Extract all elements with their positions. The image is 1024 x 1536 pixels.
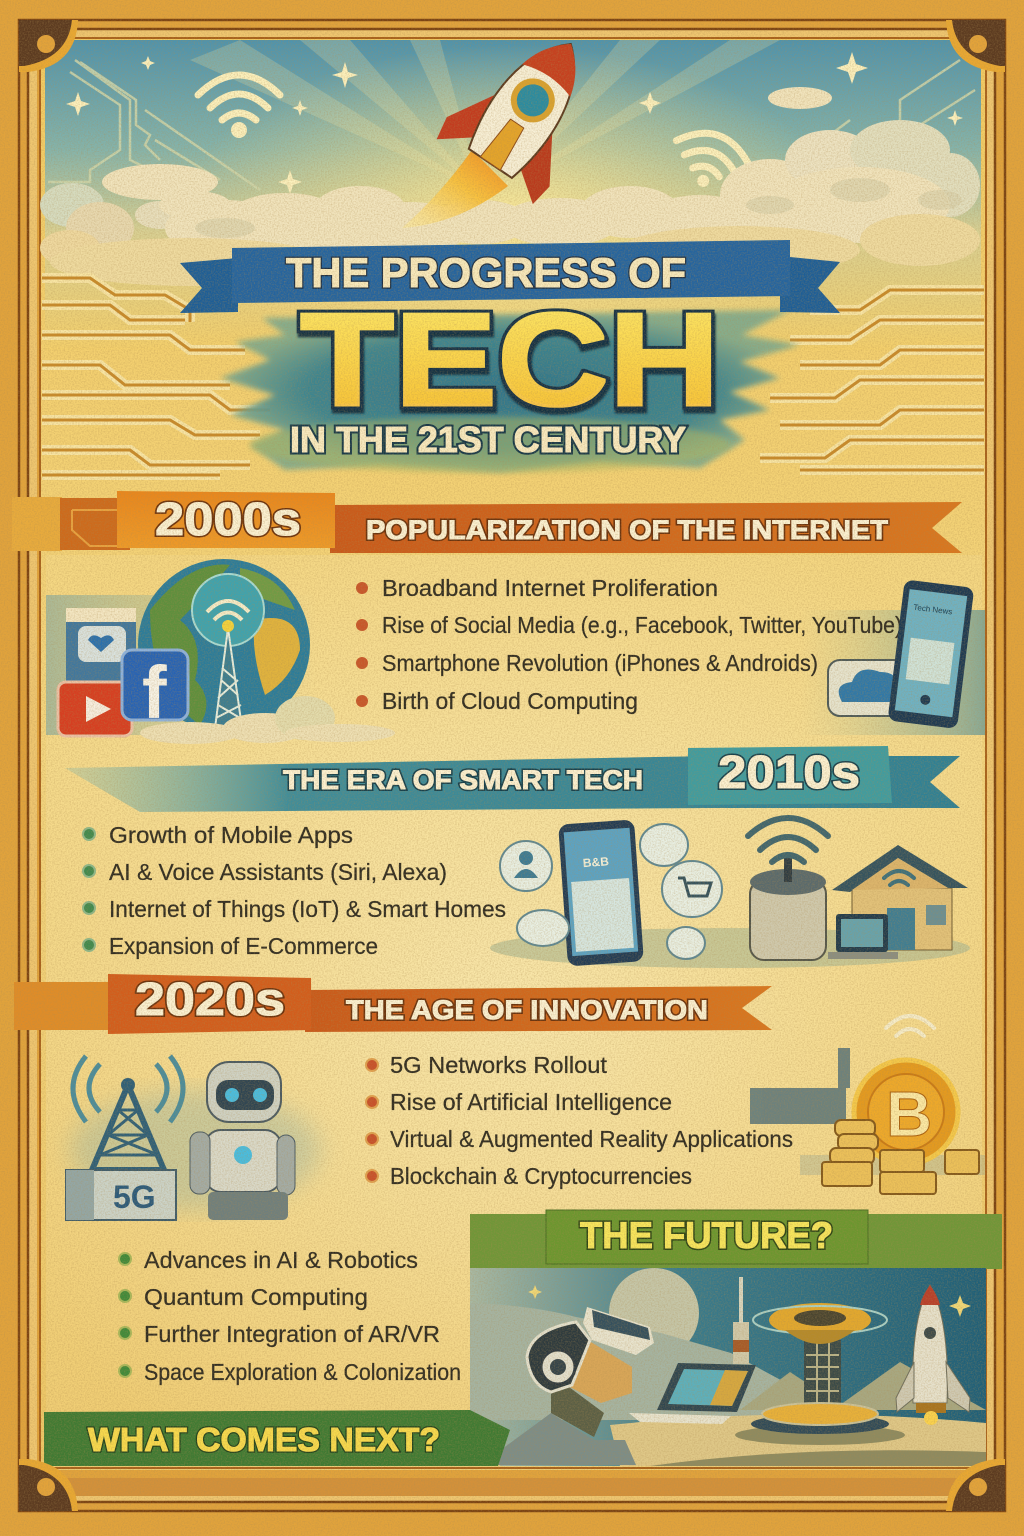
bullets 2010s: Expansion of E-Commerce xyxy=(109,933,378,959)
clouds under globe xyxy=(140,696,395,744)
icon: youtube xyxy=(58,682,132,736)
sun glow xyxy=(180,45,840,385)
title lower glow xyxy=(250,417,730,473)
year label: 2020s xyxy=(135,973,285,1025)
bullets 2020s xyxy=(366,1052,793,1189)
band heading: THE ERA OF SMART TECH xyxy=(283,765,643,795)
ribbon label: WHAT COMES NEXT? xyxy=(88,1421,440,1458)
left scene haze xyxy=(70,1090,320,1210)
icon: quantum computer xyxy=(735,1303,905,1445)
neck xyxy=(551,1387,604,1437)
right circuit board xyxy=(760,290,984,470)
rocket right fin xyxy=(506,122,579,206)
face xyxy=(566,1333,632,1403)
band circuit inset xyxy=(72,510,118,546)
section 2020s band xyxy=(14,973,772,1034)
icon: vr person xyxy=(498,1307,654,1465)
icon: cloud device xyxy=(828,660,912,716)
cloud shading xyxy=(195,178,962,238)
sun rays xyxy=(190,40,780,190)
title burst xyxy=(220,310,800,472)
bullets 2000s: Birth of Cloud Computing xyxy=(382,688,638,714)
lower pale wash xyxy=(46,555,982,1470)
helmet xyxy=(527,1322,590,1392)
frame fill bottom xyxy=(42,1478,986,1496)
corner ornament bottom left xyxy=(19,1459,78,1511)
bullets future: Quantum Computing xyxy=(144,1284,368,1310)
bullets 2000s xyxy=(356,575,902,714)
panel 2000s xyxy=(46,559,985,744)
icon: person in bubble xyxy=(514,851,538,878)
icon: phone with apps: B&B xyxy=(582,854,610,870)
headset visor xyxy=(592,1310,650,1340)
space scene xyxy=(470,1268,986,1466)
bullets future: Space Exploration & Colonization xyxy=(144,1359,461,1385)
title main word: TECH xyxy=(300,286,720,433)
year label: 2010s xyxy=(718,746,860,798)
ribbon tab xyxy=(546,1210,868,1264)
bullets 2020s: Rise of Artificial Intelligence xyxy=(390,1089,672,1115)
ribbon band xyxy=(470,1214,1002,1269)
left circuit board xyxy=(42,278,270,475)
band main xyxy=(65,756,960,812)
bullets future: Advances in AI & Robotics xyxy=(144,1247,418,1273)
icon: robot xyxy=(190,1062,295,1220)
band heading: THE AGE OF INNOVATION xyxy=(346,995,708,1025)
speech bubbles xyxy=(500,824,722,959)
icon: laptop tablet xyxy=(629,1363,756,1424)
left texture xyxy=(46,595,316,735)
ground shadow xyxy=(650,1450,986,1466)
rocket body xyxy=(462,25,599,182)
icon: house wifi xyxy=(884,871,914,885)
icon: house xyxy=(832,845,968,950)
future ribbon xyxy=(470,1210,1002,1269)
section 2010s band xyxy=(65,746,960,812)
icon: facebook: f xyxy=(142,651,167,734)
corner ornament bottom right xyxy=(946,1459,1005,1511)
corner ornament top left xyxy=(19,20,78,72)
icon: bitcoin xyxy=(854,1060,958,1164)
rocket band xyxy=(480,117,527,170)
ground xyxy=(610,1414,986,1466)
wifi icon right xyxy=(665,124,754,198)
bullets 2000s: Rise of Social Media (e.g., Facebook, Twitter, YouTube) xyxy=(382,612,902,638)
bullets 2020s: 5G Networks Rollout xyxy=(390,1052,608,1078)
bullets 2010s: Growth of Mobile Apps xyxy=(109,822,353,848)
clouds xyxy=(40,87,980,286)
rocket left fin xyxy=(433,73,506,157)
scene ground xyxy=(490,928,970,968)
band heading: POPULARIZATION OF THE INTERNET xyxy=(366,515,889,545)
icon: rocket small xyxy=(896,1285,970,1425)
corner ornament top right xyxy=(946,20,1005,72)
icon: cart xyxy=(678,878,711,896)
title ribbon xyxy=(180,240,840,313)
right texture xyxy=(800,610,985,735)
band left end xyxy=(60,498,130,550)
panel 2020s xyxy=(66,1016,985,1220)
sky panel xyxy=(45,40,981,350)
icon: smartphone xyxy=(887,579,974,729)
ribbon shape xyxy=(44,1410,510,1466)
shoulders xyxy=(498,1413,636,1465)
sky circuit lines xyxy=(48,60,975,190)
hills right xyxy=(740,1362,986,1410)
icon: smartphone: Tech News xyxy=(913,603,953,616)
hill left xyxy=(470,1303,790,1420)
bullets 2010s: AI & Voice Assistants (Siri, Alexa) xyxy=(109,859,447,885)
bullets 2020s: Blockchain & Cryptocurrencies xyxy=(390,1163,692,1189)
headset xyxy=(583,1307,654,1355)
icon: 5G tower xyxy=(92,1078,164,1170)
icon: heart app xyxy=(66,608,136,700)
year label: 2000s xyxy=(155,493,301,545)
panel future xyxy=(119,1247,986,1466)
year tab xyxy=(108,974,311,1034)
icon: phone with apps xyxy=(558,819,644,966)
panel 2010s xyxy=(83,818,970,968)
stars xyxy=(66,52,963,194)
icon: smart speaker xyxy=(750,858,826,960)
year tab xyxy=(688,746,892,805)
icon: wifi small xyxy=(886,1016,934,1036)
title line three: IN THE 21ST CENTURY xyxy=(290,419,686,460)
icon: tower xyxy=(215,620,242,728)
band main xyxy=(305,986,772,1032)
city skyline xyxy=(750,1048,985,1175)
band main xyxy=(330,502,962,553)
rocket flame xyxy=(402,150,508,228)
bullets 2010s: Internet of Things (IoT) & Smart Homes xyxy=(109,896,506,922)
rocket window xyxy=(506,74,559,127)
year tab xyxy=(117,491,335,548)
bullets future: Further Integration of AR/VR xyxy=(144,1321,440,1347)
wifi icon left xyxy=(198,75,280,138)
icon: facebook xyxy=(122,650,188,734)
title line one: THE PROGRESS OF xyxy=(286,249,686,296)
bullets future xyxy=(119,1247,461,1385)
ribbon right tail xyxy=(780,256,840,313)
icon: spire xyxy=(733,1277,749,1364)
icon: laptop xyxy=(828,914,898,959)
bullets 2000s: Smartphone Revolution (iPhones & Androids) xyxy=(382,650,818,676)
icon: globe xyxy=(138,559,310,731)
icon: bitcoin: B xyxy=(886,1078,932,1150)
icon: 5G box xyxy=(66,1170,176,1220)
rocket nose xyxy=(522,28,595,97)
bullets 2000s: Broadband Internet Proliferation xyxy=(382,575,718,601)
icon: speaker wifi xyxy=(748,818,828,862)
moon xyxy=(609,1268,699,1358)
band left fade xyxy=(12,497,62,551)
bullets 2010s xyxy=(83,822,506,959)
bullets 2020s: Virtual & Augmented Reality Applications xyxy=(390,1126,793,1152)
what comes next ribbon xyxy=(44,1410,510,1466)
stars xyxy=(528,1285,971,1317)
ribbon label: THE FUTURE? xyxy=(580,1215,833,1256)
band left end xyxy=(14,982,114,1030)
ribbon main xyxy=(232,240,790,303)
rocket xyxy=(433,9,622,206)
icon: signal waves xyxy=(73,1056,183,1122)
section 2000s band xyxy=(12,491,962,553)
headphone xyxy=(541,1350,575,1384)
ribbon left tail xyxy=(180,258,238,313)
icon: coin stacks xyxy=(822,1120,979,1194)
icon: 5G box: 5G xyxy=(113,1179,156,1215)
